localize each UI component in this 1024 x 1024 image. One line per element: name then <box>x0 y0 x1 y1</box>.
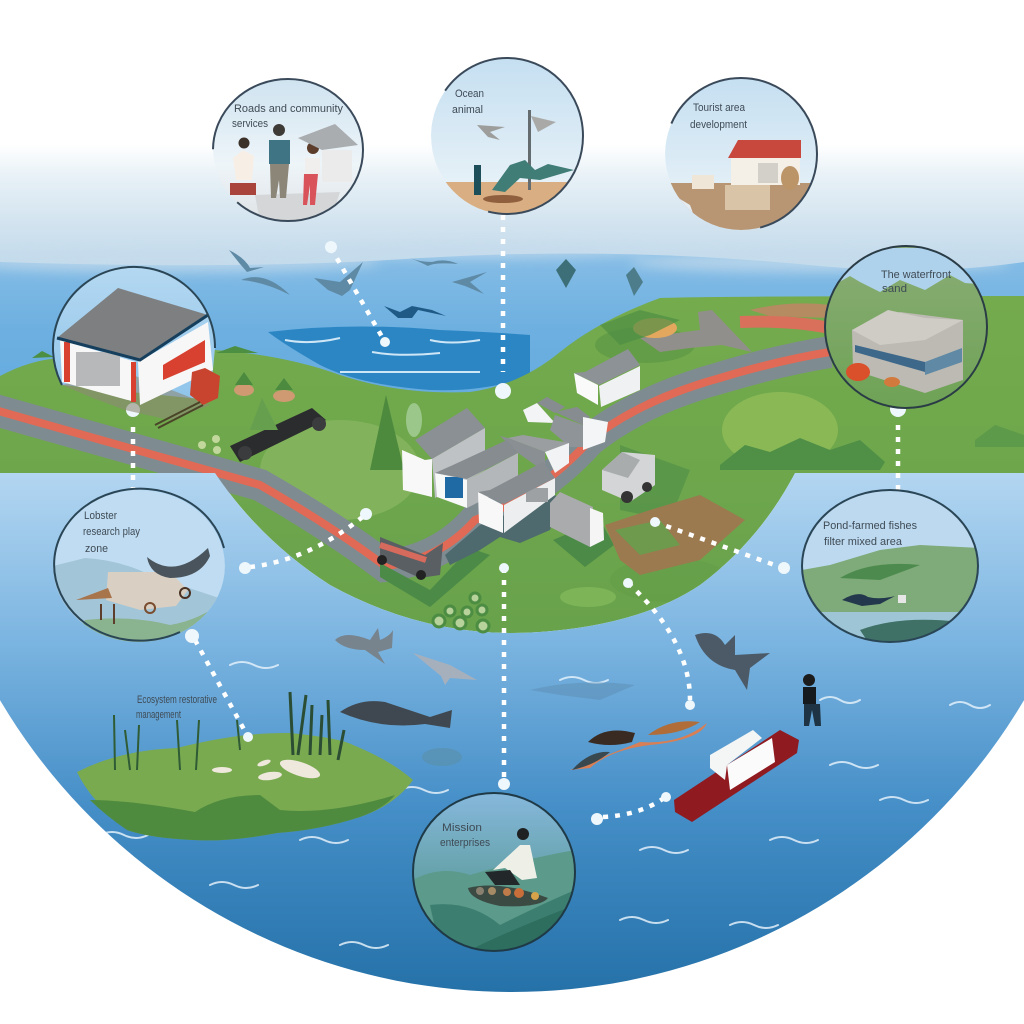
dark base under buildings <box>380 445 690 607</box>
upper land <box>0 296 1024 633</box>
shrub cluster <box>433 593 489 632</box>
red machine <box>155 368 220 428</box>
heading: house panel: Tourist area <box>693 102 746 114</box>
panel: red roof house <box>665 78 817 233</box>
panel: red roof house: development <box>690 119 747 131</box>
boat <box>674 730 799 822</box>
panel: fish and hills <box>802 490 980 645</box>
seedlings: carrots <box>234 372 295 402</box>
panel: people and building <box>213 79 363 222</box>
grey barn <box>550 492 593 547</box>
middle house <box>435 473 467 508</box>
bay ripples <box>285 338 480 372</box>
panel: coastal wind: animal <box>452 104 483 116</box>
panel: coastal housing <box>825 246 990 408</box>
panel: fish and hills: filter mixed area <box>824 536 903 548</box>
distant haze clouds <box>0 242 1010 272</box>
panel: coastal wind <box>431 58 583 216</box>
wave marks <box>100 662 990 948</box>
panel: person in boat <box>413 793 575 951</box>
upper sea <box>0 254 1024 480</box>
front house <box>478 492 503 533</box>
darker meadow patches <box>595 327 730 602</box>
connector nodes <box>126 241 906 825</box>
truck <box>602 452 655 502</box>
bay water <box>268 326 530 390</box>
heading: animal panel: Lobster <box>84 510 117 522</box>
panel: animal on shore <box>53 490 225 645</box>
island caption: management <box>136 709 181 721</box>
island caption: Ecosystem restorative <box>137 694 217 706</box>
background sky <box>0 0 1024 300</box>
heading: housing panel: The waterfront <box>881 269 951 281</box>
sea creatures <box>335 628 770 766</box>
lower sea <box>0 473 1024 1024</box>
panel outline <box>54 489 224 641</box>
panel outline <box>431 58 583 214</box>
back buildings <box>523 403 555 423</box>
panel outline <box>802 490 978 642</box>
island caption <box>136 694 217 721</box>
island <box>77 692 413 840</box>
panel: animal on shore: research play <box>83 526 140 538</box>
orange creature <box>570 721 707 770</box>
panel outline <box>665 78 817 230</box>
heading: fish panel: Pond-farmed fishes <box>823 520 917 532</box>
small pale shrubs <box>198 435 221 454</box>
heading: people panel: Roads and community <box>234 103 343 115</box>
panel outline <box>825 246 987 408</box>
leaf <box>560 587 616 607</box>
panel outline <box>53 267 215 385</box>
dotted connectors <box>133 215 898 817</box>
top house <box>574 373 598 405</box>
person on boat <box>803 674 821 726</box>
panel: warehouse <box>53 267 215 420</box>
birds over sea <box>229 250 643 318</box>
shoreline tufts <box>32 346 258 358</box>
brown field <box>605 495 745 575</box>
panel outline <box>213 79 363 221</box>
panel outline <box>413 793 575 951</box>
big left house <box>402 450 432 497</box>
panel: people and building: services <box>232 118 268 130</box>
panel: coastal housing: sand <box>882 283 907 295</box>
road <box>0 322 830 566</box>
heading: coastal panel: Ocean <box>455 88 484 100</box>
heading: boat panel: Mission <box>442 822 482 834</box>
brown top fields and machine <box>600 303 830 352</box>
panel: person in boat: enterprises <box>440 837 490 849</box>
central village buildings <box>402 349 655 547</box>
trees <box>250 395 422 470</box>
panel: animal on shore: zone <box>85 543 108 555</box>
vehicle: black trailer <box>230 408 326 462</box>
bushes <box>260 392 1024 520</box>
tractor <box>377 537 443 580</box>
